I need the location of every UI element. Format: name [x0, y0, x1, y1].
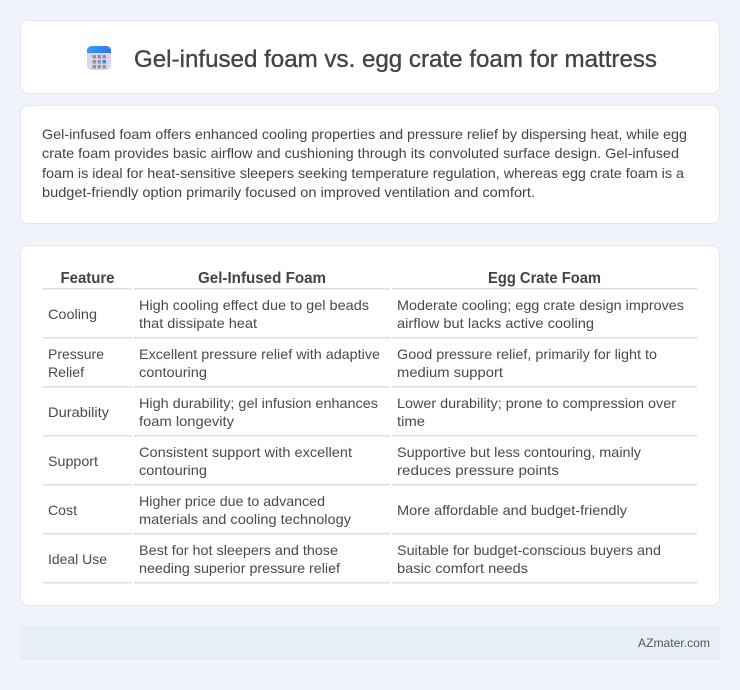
row: support: contouring — [139, 462, 207, 478]
row: ideal use: basic comfort needs — [397, 560, 528, 576]
row: pressure relief: Relief — [48, 364, 84, 380]
row: durability: Lower durability; prone to compression over — [397, 395, 676, 411]
row: durability — [48, 395, 676, 429]
row: ideal use — [48, 542, 661, 576]
row: ideal use: Suitable for budget-conscious buyers and — [397, 542, 661, 558]
footer bar — [20, 626, 720, 660]
footer bar: AZmater.com — [638, 636, 710, 650]
row: pressure relief: Good pressure relief, primarily for light to — [397, 346, 657, 362]
row: durability: time — [397, 413, 425, 429]
row: cooling: Cooling — [48, 306, 97, 322]
row: pressure relief: medium support — [397, 364, 503, 380]
icon: calendar — [87, 46, 111, 70]
row: ideal use: Ideal Use — [48, 551, 107, 567]
row: cost: Higher price due to advanced — [139, 493, 325, 509]
row: support: reduces pressure points — [397, 462, 559, 478]
table header row — [60, 270, 601, 287]
panel: summary paragraph — [20, 106, 720, 224]
panel: title card — [20, 20, 720, 94]
panel: summary paragraph: budget-friendly option primarily focused on improved ventilation and comfort. — [42, 184, 535, 200]
panel: comparison table — [20, 246, 720, 606]
row: support — [48, 444, 641, 478]
row: support: Support — [48, 453, 98, 469]
row: pressure relief — [48, 346, 657, 380]
row: durability: High durability; gel infusion enhances — [139, 395, 378, 411]
title: Gel-infused foam vs. egg crate foam for mattress — [134, 46, 657, 73]
row: ideal use: needing superior pressure relief — [139, 560, 340, 576]
row: pressure relief: contouring — [139, 364, 207, 380]
row: durability: Durability — [48, 404, 109, 420]
row: cooling: airflow but lacks active cooling — [397, 315, 594, 331]
row: cooling: that dissipate heat — [139, 315, 257, 331]
panel: summary paragraph: Gel-infused foam offers enhanced cooling properties and pressure relief by dispersing heat, while egg — [42, 126, 687, 142]
row: ideal use: Best for hot sleepers and those — [139, 542, 338, 558]
row: cost: materials and cooling technology — [139, 511, 351, 527]
row: support: Supportive but less contouring, mainly — [397, 444, 641, 460]
row: cost: Cost — [48, 502, 77, 518]
table header row: Feature — [60, 270, 115, 287]
row: cost: More affordable and budget-friendly — [397, 502, 627, 518]
row: pressure relief: Pressure — [48, 346, 104, 362]
row: cost — [48, 493, 627, 527]
row: durability: foam longevity — [139, 413, 234, 429]
row: support: Consistent support with excellent — [139, 444, 352, 460]
table header row: Egg Crate Foam — [488, 270, 601, 287]
row: pressure relief: Excellent pressure relief with adaptive — [139, 346, 380, 362]
row: cooling — [48, 297, 684, 331]
row: cooling: Moderate cooling; egg crate design improves — [397, 297, 684, 313]
row: cooling: High cooling effect due to gel beads — [139, 297, 369, 313]
panel: summary paragraph: crate foam provides basic airflow and cushioning through its convoluted surface design. Gel-infused — [42, 145, 679, 161]
table header row: Gel-Infused Foam — [198, 270, 326, 287]
panel: summary paragraph: foam is ideal for heat-sensitive sleepers seeking temperature regulation, whereas egg crate foam is a — [42, 165, 684, 181]
